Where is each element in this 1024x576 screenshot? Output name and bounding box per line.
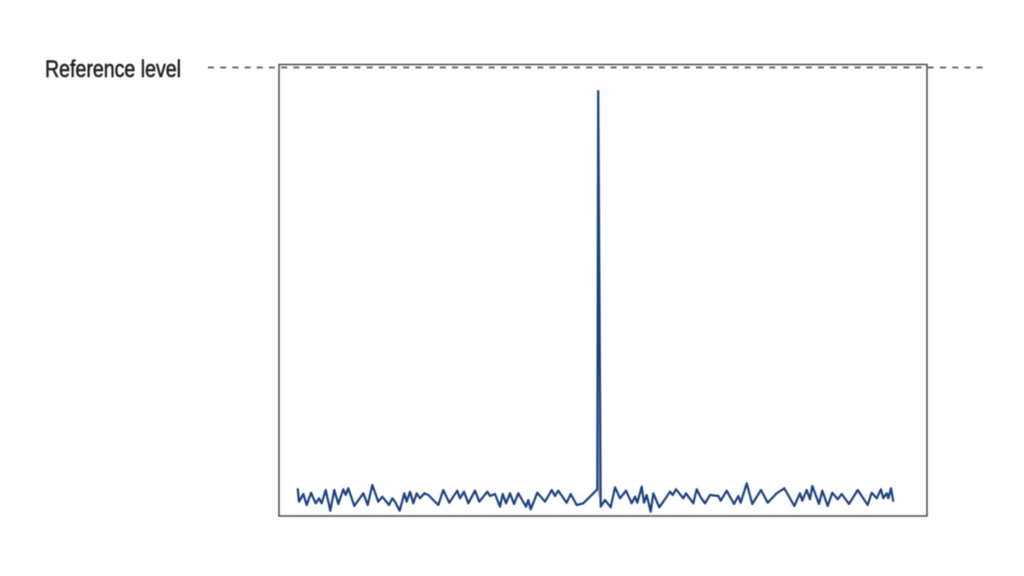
central spike fill: [597, 91, 601, 506]
reference level dashed line: [208, 66, 984, 68]
label: reference level: Reference level: [45, 56, 181, 83]
chart frame: [279, 64, 927, 516]
spectrum trace with central spike: [298, 91, 893, 512]
